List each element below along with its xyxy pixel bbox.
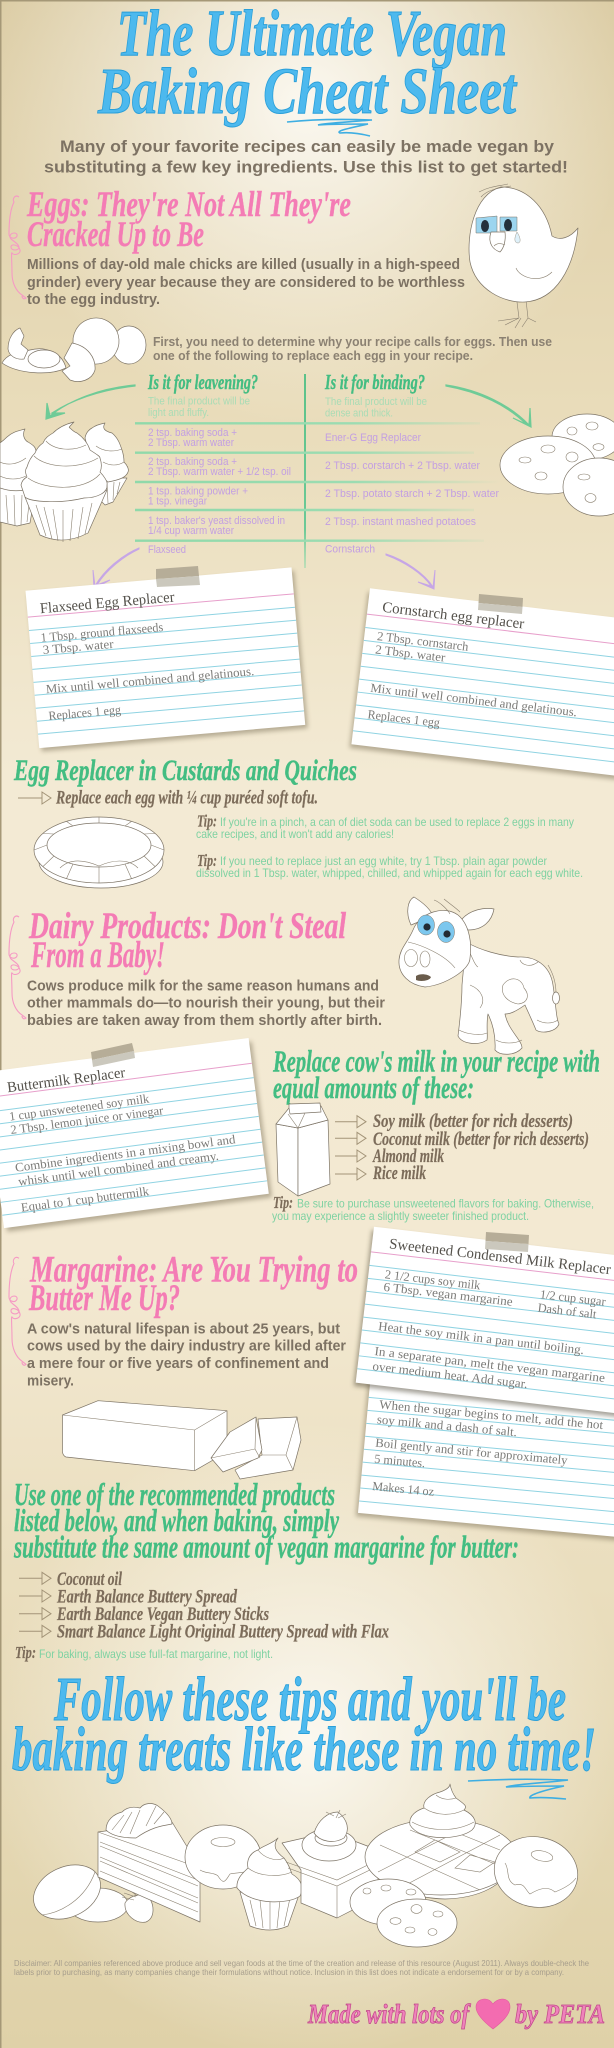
- cupcake left: [0, 429, 38, 526]
- treat: cream cake square: [282, 1810, 378, 1918]
- column: leavening: 2 tsp. baking soda +: [148, 427, 237, 439]
- card: cornstarch egg replacer: Cornstarch egg replacer: [381, 600, 525, 633]
- card: buttermilk replacer: whisk until well combined and creamy.: [17, 1149, 219, 1189]
- title: [97, 0, 517, 128]
- dairy body text: babies are taken away from them shortly after birth.: [27, 1013, 382, 1029]
- margarine body text: cows used by the dairy industry are killed after: [27, 1339, 346, 1355]
- column: leavening: 2 Tbsp. warm water + 1/2 tsp. oil: [148, 466, 291, 478]
- column: leavening: Flaxseed: [148, 544, 186, 556]
- arrow: tofu: [18, 792, 51, 804]
- margarine swirl bracket: [9, 1257, 26, 1365]
- card: flaxseed egg replacer: Mix until well combined and gelatinous.: [45, 664, 255, 696]
- card: buttermilk replacer: 2 Tbsp. lemon juice or vinegar: [10, 1103, 165, 1137]
- treat: sandwich cookie: [25, 1855, 128, 1929]
- margarine body text: A cow's natural lifespan is about 25 years, but: [27, 1321, 340, 1337]
- heading: dairy products: Dairy Products: Don't Steal: [28, 906, 347, 947]
- card: cornstarch egg replacer: 2 Tbsp. cornstarch: [376, 629, 470, 654]
- icon: cupcakes: [0, 422, 128, 542]
- heading: replace cow's milk: equal amounts of these:: [273, 1070, 474, 1105]
- column: binding: Cornstarch: [325, 544, 375, 556]
- icon: milk carton: [276, 1103, 330, 1196]
- card: flaxseed egg replacer: [26, 566, 308, 751]
- cupcake right: [85, 423, 128, 505]
- icon: heart: [476, 1999, 510, 2029]
- heading: egg replacer in custards: Egg Replacer in Custards and Quiches: [13, 754, 357, 787]
- illustration: baked treats: [25, 1784, 584, 1947]
- card: sweetened condensed milk replacer: In a separate pan, melt the vegan margarine: [374, 1344, 606, 1385]
- card: sweetened condensed milk replacer: 6 Tbsp. vegan margarine: [383, 1280, 514, 1309]
- eggs swirl bracket: [9, 196, 26, 299]
- column: leavening: 1 tsp. vinegar: [148, 496, 207, 508]
- dairy body text: [27, 979, 385, 1029]
- margarine body text: misery.: [27, 1373, 74, 1389]
- title underline scribble: [287, 119, 372, 136]
- closing headline: [12, 1666, 596, 1784]
- arrow: purple right: [386, 554, 435, 589]
- column: leavening: 1 tsp. baking powder +: [148, 486, 248, 498]
- heading: recommended products: listed below, and when baking, simply: [14, 1502, 340, 1538]
- milk options list: Rice milk: [372, 1163, 426, 1184]
- tip: full-fat margarine: [15, 1643, 273, 1662]
- treat: cupcake: [237, 1838, 302, 1930]
- instruction text: [153, 334, 552, 363]
- disclaimer: labels prior to purchasing, as many companies change their formulations without notice. Inclusion in this list does not indicate a endorsement for or by a company.: [14, 1967, 564, 1977]
- heading: eggs: Eggs: They're Not All They're: [26, 184, 351, 224]
- card: flaxseed egg replacer: Replaces 1 egg: [48, 703, 122, 723]
- instruction text: one of the following to replace each egg in your recipe.: [153, 348, 473, 363]
- tip: diet soda: [196, 812, 574, 841]
- eggs body text: [27, 257, 465, 308]
- treat: whipped cream swirl: [410, 1784, 475, 1838]
- heading: dairy products: [28, 906, 347, 976]
- treat: cookies: [350, 1879, 457, 1947]
- margarine product list: Earth Balance Vegan Buttery Sticks: [56, 1604, 269, 1625]
- column: leavening: 1/4 cup warm water: [148, 525, 234, 537]
- column: leavening: light and fluffy.: [148, 407, 209, 419]
- heading: eggs: Cracked Up to Be: [27, 214, 204, 254]
- card: buttermilk replacer: Buttermilk Replacer: [6, 1065, 126, 1096]
- intro text: [44, 137, 568, 177]
- intro text: substituting a few key ingredients. Use this list to get started!: [44, 158, 568, 177]
- column: binding: 2 Tbsp. potato starch + 2 Tbsp. water: [325, 488, 499, 500]
- eggs body text: Millions of day-old male chicks are killed (usually in a high-speed: [27, 257, 460, 273]
- milk options list: [335, 1111, 589, 1184]
- cupcake center: [21, 422, 107, 542]
- eggs body text: to the egg industry.: [27, 292, 160, 308]
- column: leavening: 2 Tbsp. warm water: [148, 437, 234, 449]
- icon: crying chick: [469, 184, 578, 328]
- icon: cookies: [500, 414, 614, 516]
- tip: agar powder: [196, 851, 583, 880]
- disclaimer: [14, 1958, 589, 1977]
- card: sweetened condensed milk replacer: Dash of salt: [537, 1301, 598, 1321]
- tip: agar powder: Tip:: [197, 851, 217, 870]
- tip: agar powder: If you need to replace just an egg white, try 1 Tbsp. plain agar powder: [220, 854, 547, 868]
- tip: unsweetened: you may experience a slightly sweeter finished product.: [272, 1209, 529, 1223]
- column: binding: 2 Tbsp. corstarch + 2 Tbsp. water: [325, 460, 480, 472]
- arrow: green right: [446, 385, 531, 427]
- column: binding: [324, 370, 499, 556]
- credit: made with love by PETA: by PETA: [515, 1999, 605, 2029]
- heading: margarine: Butter Me Up?: [28, 1278, 180, 1319]
- heading: recommended products: Use one of the recommended products: [14, 1476, 335, 1512]
- tip: full-fat margarine: Tip:: [15, 1643, 36, 1662]
- card: sweetened condensed milk replacer: 5 minutes.: [374, 1452, 426, 1470]
- column: binding: Is it for binding?: [324, 370, 425, 394]
- card: sweetened condensed milk replacer: 2 1/2 cups soy milk: [384, 1267, 482, 1293]
- card: sweetened condensed milk replacer: [354, 1227, 614, 1541]
- card: sweetened condensed milk replacer: When the sugar begins to melt, add the hot: [379, 1397, 604, 1432]
- heading: replace cow's milk: [272, 1044, 600, 1105]
- margarine product list: Earth Balance Buttery Spread: [56, 1587, 237, 1608]
- tofu instruction: Replace each egg with ¼ cup puréed soft tofu.: [55, 787, 318, 808]
- arrow: purple left: [93, 548, 139, 589]
- icon: pie: [34, 817, 164, 888]
- margarine body text: a mere four or five years of confinement and: [27, 1356, 329, 1372]
- dairy body text: other mammals do—to nourish their young, but their: [27, 996, 385, 1012]
- intro text: Many of your favorite recipes can easily be made vegan by: [60, 137, 555, 156]
- card: sweetened condensed milk replacer: over medium heat. Add sugar.: [372, 1359, 528, 1391]
- column: leavening: Is it for leavening?: [147, 370, 258, 394]
- instruction text: First, you need to determine why your recipe calls for eggs. Then use: [153, 334, 552, 349]
- card: sweetened condensed milk replacer: Heat the soy milk in a pan until boiling.: [378, 1319, 585, 1357]
- closing underline scribble: [468, 1779, 568, 1799]
- margarine product list: [19, 1569, 389, 1643]
- card: flaxseed egg replacer: 1 Tbsp. ground flaxseeds: [40, 620, 164, 645]
- margarine product list: Coconut oil: [57, 1569, 123, 1590]
- eggs body text: grinder) every year because they are considered to be worthless: [27, 275, 465, 291]
- icon: butter: [62, 1401, 301, 1479]
- heading: recommended products: [13, 1476, 519, 1564]
- dairy swirl bracket: [9, 916, 26, 1019]
- column: leavening: The final product will be: [148, 395, 250, 407]
- column: leavening: 2 tsp. baking soda +: [148, 456, 237, 468]
- card: buttermilk replacer: 1 cup unsweetened soy milk: [8, 1091, 151, 1124]
- credit: made with love by PETA: [307, 1999, 605, 2029]
- treat: donut: [185, 1825, 261, 1889]
- tip: unsweetened: [272, 1193, 594, 1223]
- treat: lattice pie: [365, 1819, 517, 1899]
- dairy body text: Cows produce milk for the same reason humans and: [27, 979, 379, 995]
- card: cornstarch egg replacer: 2 Tbsp. water: [375, 642, 447, 665]
- card: sweetened condensed milk replacer: soy milk and a dash of salt.: [376, 1412, 518, 1439]
- column: binding: 2 Tbsp. instant mashed potatoes: [325, 516, 476, 528]
- margarine body text: [27, 1321, 346, 1389]
- margarine product list: Smart Balance Light Original Buttery Spread with Flax: [57, 1622, 389, 1643]
- column: binding: Ener-G Egg Replacer: [325, 432, 421, 444]
- card: flaxseed egg replacer: 3 Tbsp. water: [42, 637, 115, 657]
- column: binding: The final product will be: [325, 396, 427, 408]
- card: buttermilk replacer: Equal to 1 cup buttermilk: [20, 1184, 151, 1215]
- tip: unsweetened: Tip:: [273, 1193, 293, 1212]
- credit: made with love by PETA: Made with lots of: [307, 1999, 472, 2029]
- column: binding: dense and thick.: [325, 408, 393, 420]
- card: sweetened condensed milk replacer: Sweetened Condensed Milk Replacer: [388, 1236, 612, 1278]
- icon: calf: [399, 897, 560, 1054]
- icon: cracked eggs: [2, 313, 146, 382]
- card: cornstarch egg replacer: Mix until well combined and gelatinous.: [370, 681, 578, 719]
- card: buttermilk replacer: Combine ingredients in a mixing bowl and: [14, 1132, 237, 1175]
- card: cornstarch egg replacer: [349, 588, 614, 780]
- arrow: green left: [46, 385, 135, 419]
- treat: glazed donut: [488, 1829, 584, 1915]
- heading: eggs: [26, 184, 351, 254]
- card: cornstarch egg replacer: Replaces 1 egg: [367, 707, 441, 730]
- heading: margarine: [28, 1250, 358, 1319]
- tip: diet soda: cake recipes, and it won't add any calories!: [196, 827, 394, 841]
- tip: diet soda: Tip:: [197, 812, 217, 831]
- card: sweetened condensed milk replacer: 1/2 cup sugar: [539, 1287, 607, 1309]
- card: sweetened condensed milk replacer: Boil gently and stir for approximately: [375, 1436, 569, 1468]
- heading: dairy products: From a Baby!: [30, 935, 165, 976]
- card: buttermilk replacer: [0, 1038, 272, 1232]
- treat: layer cake slice: [98, 1804, 200, 1922]
- column: leavening: 1 tsp. baker's yeast dissolved in: [148, 515, 285, 527]
- milk options list: Almond milk: [372, 1146, 444, 1167]
- column: leavening: [147, 370, 291, 556]
- heading: margarine: Margarine: Are You Trying to: [29, 1250, 358, 1291]
- treat: strawberry small: [122, 1890, 153, 1922]
- tip: full-fat margarine: For baking, always use full-fat margarine, not light.: [39, 1647, 273, 1661]
- card: sweetened condensed milk replacer: Makes 14 oz: [372, 1479, 435, 1499]
- table grid: [135, 374, 501, 568]
- card: flaxseed egg replacer: Flaxseed Egg Replacer: [39, 590, 175, 617]
